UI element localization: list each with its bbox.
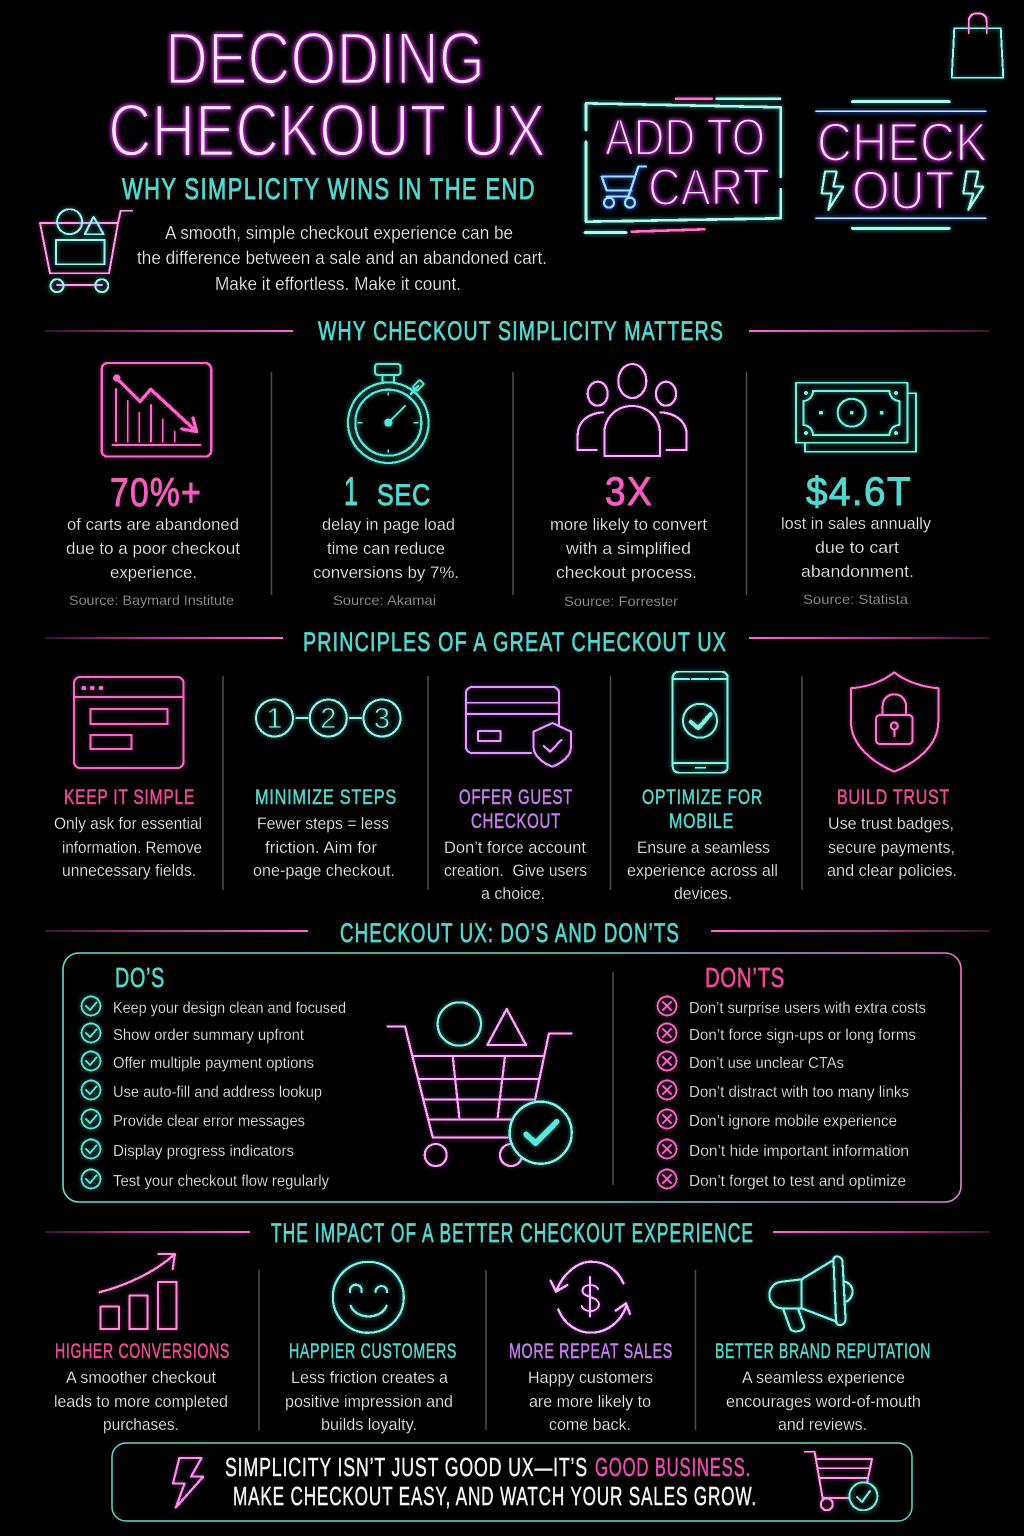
panel: offer guest checkout: Don’t force account bbox=[444, 838, 586, 857]
panel: stat 3x: more likely to convert bbox=[550, 515, 707, 534]
neon sign: check out: OUT bbox=[852, 159, 955, 221]
panel: stat 1 sec: delay in page load bbox=[322, 515, 455, 534]
panel: stat 4.6T: due to cart bbox=[815, 538, 899, 557]
panel: stat 3x: Source: Forrester bbox=[564, 593, 678, 609]
icon: bolts bbox=[822, 172, 983, 210]
icon: small cart bbox=[40, 209, 132, 292]
icon: stopwatch bbox=[348, 364, 429, 463]
panel: optimize for mobile: Ensure a seamless bbox=[637, 838, 770, 857]
panel: better brand reputation: encourages word-of-mouth bbox=[726, 1392, 921, 1411]
panel: higher conversions: HIGHER CONVERSIONS bbox=[55, 1340, 230, 1363]
icon: repeat dollar bbox=[551, 1262, 630, 1333]
neon sign: add to cart bbox=[585, 99, 781, 232]
neon sign: check out bbox=[816, 102, 988, 228]
list: do's: Offer multiple payment options bbox=[113, 1055, 314, 1072]
heading: don'ts: DON’TS bbox=[705, 962, 785, 993]
list: don'ts: Don’t ignore mobile experience bbox=[689, 1113, 897, 1130]
panel: stat 1 sec: SEC bbox=[377, 479, 431, 512]
panel: happier customers: builds loyalty. bbox=[321, 1415, 417, 1434]
list: don'ts: Don’t surprise users with extra costs bbox=[689, 1000, 926, 1017]
panel: more repeat sales bbox=[509, 1262, 673, 1434]
icon: lightning bolt bbox=[173, 1458, 203, 1508]
icon: shopping bag bbox=[952, 13, 1003, 78]
panel: optimize for mobile: devices. bbox=[674, 884, 732, 903]
list: don'ts: Don’t force sign-ups or long forms bbox=[689, 1027, 916, 1044]
icon: rising bars bbox=[99, 1254, 176, 1329]
title: DECODING bbox=[165, 17, 485, 100]
icon: smiley bbox=[333, 1262, 404, 1333]
subtitle: WHY SIMPLICITY WINS IN THE END bbox=[122, 173, 536, 206]
neon sign: check out: CHECK bbox=[817, 111, 988, 173]
section heading: principles: PRINCIPLES OF A GREAT CHECKOUT UX bbox=[303, 627, 727, 657]
panel: happier customers: Less friction creates a bbox=[291, 1368, 449, 1387]
panel: stat 4.6T: Source: Statista bbox=[803, 591, 908, 607]
panel: build trust: and clear policies. bbox=[827, 861, 957, 880]
panel: stat 1 sec: conversions by 7%. bbox=[313, 563, 459, 582]
neon sign: add to cart: ADD TO bbox=[605, 109, 765, 167]
list: don'ts: Don’t hide important information bbox=[689, 1143, 909, 1160]
list: do's: Show order summary upfront bbox=[113, 1027, 305, 1044]
icon: credit card with shield bbox=[466, 687, 571, 767]
banner text bbox=[225, 1452, 757, 1511]
panel: stat 4.6T: abandonment. bbox=[801, 562, 914, 581]
heading: do's: DO’S bbox=[115, 962, 165, 993]
panel: higher conversions: A smoother checkout bbox=[66, 1368, 216, 1387]
panel: do's and don'ts bbox=[63, 953, 961, 1202]
panel: build trust: secure payments, bbox=[828, 838, 955, 857]
panel: stat 1 sec: Source: Akamai bbox=[333, 592, 436, 608]
panel: keep it simple: Only ask for essential bbox=[54, 814, 202, 833]
panel: optimize for mobile: MOBILE bbox=[669, 810, 734, 833]
neon sign: add to cart: CART bbox=[648, 159, 770, 217]
panel: build trust bbox=[827, 672, 957, 880]
panel: better brand reputation: and reviews. bbox=[778, 1415, 867, 1434]
icon: phone with check bbox=[673, 672, 728, 773]
panel: minimize steps: one-page checkout. bbox=[253, 861, 395, 880]
panel: offer guest checkout: creation. Give users bbox=[444, 861, 587, 880]
list: do's: Use auto-fill and address lookup bbox=[113, 1084, 322, 1101]
panel: more repeat sales: come back. bbox=[549, 1415, 631, 1434]
section heading: do's and don'ts: CHECKOUT UX: DO’S AND DON’TS bbox=[340, 918, 680, 948]
panel: higher conversions bbox=[54, 1254, 230, 1434]
panel: better brand reputation bbox=[715, 1256, 931, 1434]
list: don'ts: Don’t use unclear CTAs bbox=[689, 1055, 844, 1072]
panel: stat 3x: checkout process. bbox=[556, 563, 697, 582]
panel: keep it simple bbox=[54, 677, 202, 880]
icon: megaphone bbox=[769, 1256, 852, 1331]
panel: build trust: Use trust badges, bbox=[828, 814, 954, 833]
panel: stat 3x bbox=[550, 364, 707, 609]
panel: happier customers: positive impression and bbox=[285, 1392, 453, 1411]
panel: stat 70%: experience. bbox=[110, 563, 197, 582]
panel: stat 4.6T: lost in sales annually bbox=[781, 514, 931, 533]
icon: steps 1-2-3: 3 bbox=[374, 703, 390, 735]
panel: minimize steps: Fewer steps = less bbox=[257, 814, 389, 833]
intro text: Make it effortless. Make it count. bbox=[215, 274, 461, 294]
panel: offer guest checkout bbox=[444, 687, 587, 903]
banner text: MAKE CHECKOUT EASY, AND WATCH YOUR SALES GROW. bbox=[233, 1481, 757, 1511]
panel: stat 70% bbox=[66, 363, 240, 608]
panel: minimize steps bbox=[253, 700, 400, 880]
panel: optimize for mobile: experience across all bbox=[627, 861, 778, 880]
panel: stat 1 sec: time can reduce bbox=[327, 539, 445, 558]
panel: stat 4.6T: $4.6T bbox=[806, 470, 912, 514]
panel: stat 1 sec: 1 bbox=[344, 470, 358, 514]
icon: money bbox=[796, 383, 916, 452]
panel: keep it simple: unnecessary fields. bbox=[62, 861, 196, 880]
panel: more repeat sales: Happy customers bbox=[528, 1368, 653, 1387]
panel: higher conversions: purchases. bbox=[103, 1415, 179, 1434]
icon: cart in sign bbox=[602, 167, 646, 208]
list: do's: Display progress indicators bbox=[113, 1143, 294, 1160]
panel: minimize steps: MINIMIZE STEPS bbox=[255, 786, 397, 809]
list: do's: Provide clear error messages bbox=[113, 1113, 305, 1130]
banner text: GOOD BUSINESS. bbox=[595, 1452, 751, 1482]
panel: stat 3x: with a simplified bbox=[565, 539, 691, 558]
list: do's: Keep your design clean and focused bbox=[113, 1000, 346, 1017]
callout: closing banner bbox=[112, 1443, 912, 1521]
panel: stat 70%: due to a poor checkout bbox=[66, 539, 240, 558]
section heading: why checkout simplicity matters: WHY CHECKOUT SIMPLICITY MATTERS bbox=[318, 316, 724, 346]
list: do's: Test your checkout flow regularly bbox=[113, 1173, 329, 1190]
intro text: the difference between a sale and an abandoned cart. bbox=[137, 248, 547, 268]
panel: optimize for mobile bbox=[627, 672, 778, 903]
panel: happier customers: HAPPIER CUSTOMERS bbox=[289, 1340, 457, 1363]
banner text: SIMPLICITY ISN’T JUST GOOD UX—IT’S bbox=[225, 1452, 588, 1482]
panel: happier customers bbox=[285, 1262, 457, 1434]
panel: offer guest checkout: OFFER GUEST bbox=[459, 786, 573, 809]
panel: stat 70%: 70%+ bbox=[110, 471, 202, 515]
icon: form window bbox=[74, 677, 184, 768]
icon: steps 1-2-3 bbox=[256, 700, 400, 736]
panel: better brand reputation: A seamless experience bbox=[742, 1368, 905, 1387]
panel: keep it simple: information. Remove bbox=[62, 838, 202, 857]
panel: stat 3x: 3X bbox=[605, 470, 653, 514]
list: don'ts bbox=[658, 996, 926, 1190]
panel: offer guest checkout: CHECKOUT bbox=[471, 810, 561, 833]
panel: keep it simple: KEEP IT SIMPLE bbox=[64, 786, 195, 809]
panel: offer guest checkout: a choice. bbox=[481, 884, 545, 903]
panel: stat 70%: Source: Baymard Institute bbox=[69, 592, 234, 608]
panel: minimize steps: friction. Aim for bbox=[265, 838, 377, 857]
icon: banner cart bbox=[805, 1452, 877, 1510]
icon: shield with lock bbox=[851, 672, 938, 772]
title bbox=[108, 17, 546, 172]
panel: stat 70%: of carts are abandoned bbox=[67, 515, 239, 534]
panel: higher conversions: leads to more completed bbox=[54, 1392, 228, 1411]
icon: people bbox=[578, 364, 687, 456]
panel: optimize for mobile: OPTIMIZE FOR bbox=[642, 786, 763, 809]
panel: stat 4.6T bbox=[781, 383, 931, 607]
list: do's bbox=[82, 996, 346, 1190]
list: don'ts: Don’t distract with too many links bbox=[689, 1084, 909, 1101]
panel: build trust: BUILD TRUST bbox=[837, 786, 950, 809]
icon: large cart with check bbox=[387, 1002, 572, 1166]
intro text: A smooth, simple checkout experience can be bbox=[165, 223, 513, 243]
list: don'ts: Don’t forget to test and optimize bbox=[689, 1173, 906, 1190]
section heading: impact: THE IMPACT OF A BETTER CHECKOUT EXPERIENCE bbox=[271, 1218, 754, 1248]
title: CHECKOUT UX bbox=[108, 89, 546, 172]
icon: falling chart bbox=[102, 363, 211, 457]
panel: stat 1 sec bbox=[313, 364, 459, 608]
panel: more repeat sales: are more likely to bbox=[529, 1392, 651, 1411]
intro text bbox=[137, 223, 547, 294]
icon: steps 1-2-3: 1 bbox=[266, 703, 283, 735]
panel: more repeat sales: MORE REPEAT SALES bbox=[509, 1340, 673, 1363]
icon: steps 1-2-3: 2 bbox=[320, 703, 336, 735]
